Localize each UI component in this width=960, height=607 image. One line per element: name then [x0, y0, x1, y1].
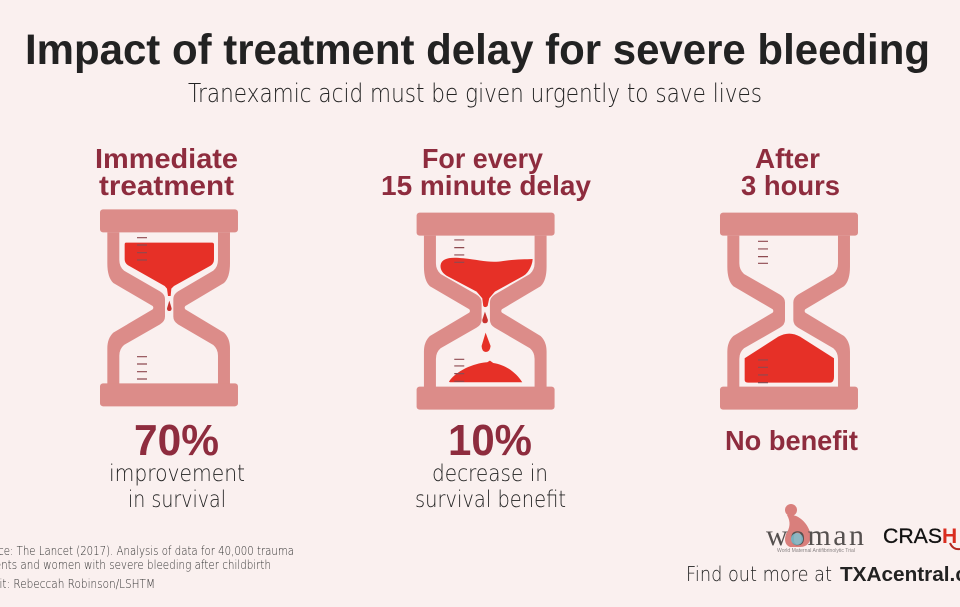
heading: immediate treatment — [95, 143, 238, 201]
stat: 70%: 70% — [134, 416, 219, 465]
label: decrease in survival benefit: survival benefit — [415, 487, 566, 513]
text: find out more — [686, 562, 960, 586]
panel: after 3 hours — [720, 143, 858, 456]
heading: for every 15 minute delay: 15 minute delay — [381, 170, 591, 201]
subtitle: Tranexamic acid must be given urgently to save lives — [188, 79, 762, 109]
text: trial name: World Maternal Antifibrinolytic Trial — [777, 548, 855, 554]
icon: red swoosh — [950, 543, 960, 549]
text: red H: H — [942, 525, 957, 548]
icon: hourglass nearly full — [100, 209, 238, 406]
heading: for every 15 minute delay — [381, 143, 591, 201]
label: decrease in survival benefit: decrease in — [432, 461, 548, 487]
text: CRAS: CRAS — [883, 525, 942, 548]
label: decrease in survival benefit — [415, 461, 566, 513]
icon: hourglass draining — [417, 213, 555, 410]
label: improvement in survival: in survival — [128, 487, 226, 513]
panel: 15 minute delay — [381, 143, 591, 513]
heading: immediate treatment: treatment — [99, 170, 234, 201]
label: improvement in survival — [109, 461, 245, 513]
logo: CRASH — [883, 525, 960, 549]
panel: immediate treatment — [95, 143, 245, 513]
icon: globe — [791, 533, 803, 545]
title: Impact of treatment delay for severe bleeding — [25, 26, 930, 74]
heading: after 3 hours: After — [755, 143, 820, 174]
label: no benefit: No benefit — [725, 425, 858, 456]
heading: immediate treatment: Immediate — [95, 143, 238, 174]
icon: hourglass empty on top — [720, 213, 858, 410]
label: improvement in survival: improvement — [109, 461, 245, 487]
text: find out more: Find out more at — [686, 562, 832, 586]
stat: 10%: 10% — [448, 416, 532, 465]
heading: after 3 hours: 3 hours — [741, 170, 840, 201]
text block: source and credit — [0, 544, 294, 591]
text: woman wordmark: woman — [766, 519, 864, 552]
heading: after 3 hours — [741, 143, 840, 201]
icon: pregnant figure — [785, 504, 811, 547]
heading: for every 15 minute delay: For every — [422, 143, 543, 174]
logo: WOMAN trial — [766, 504, 864, 554]
